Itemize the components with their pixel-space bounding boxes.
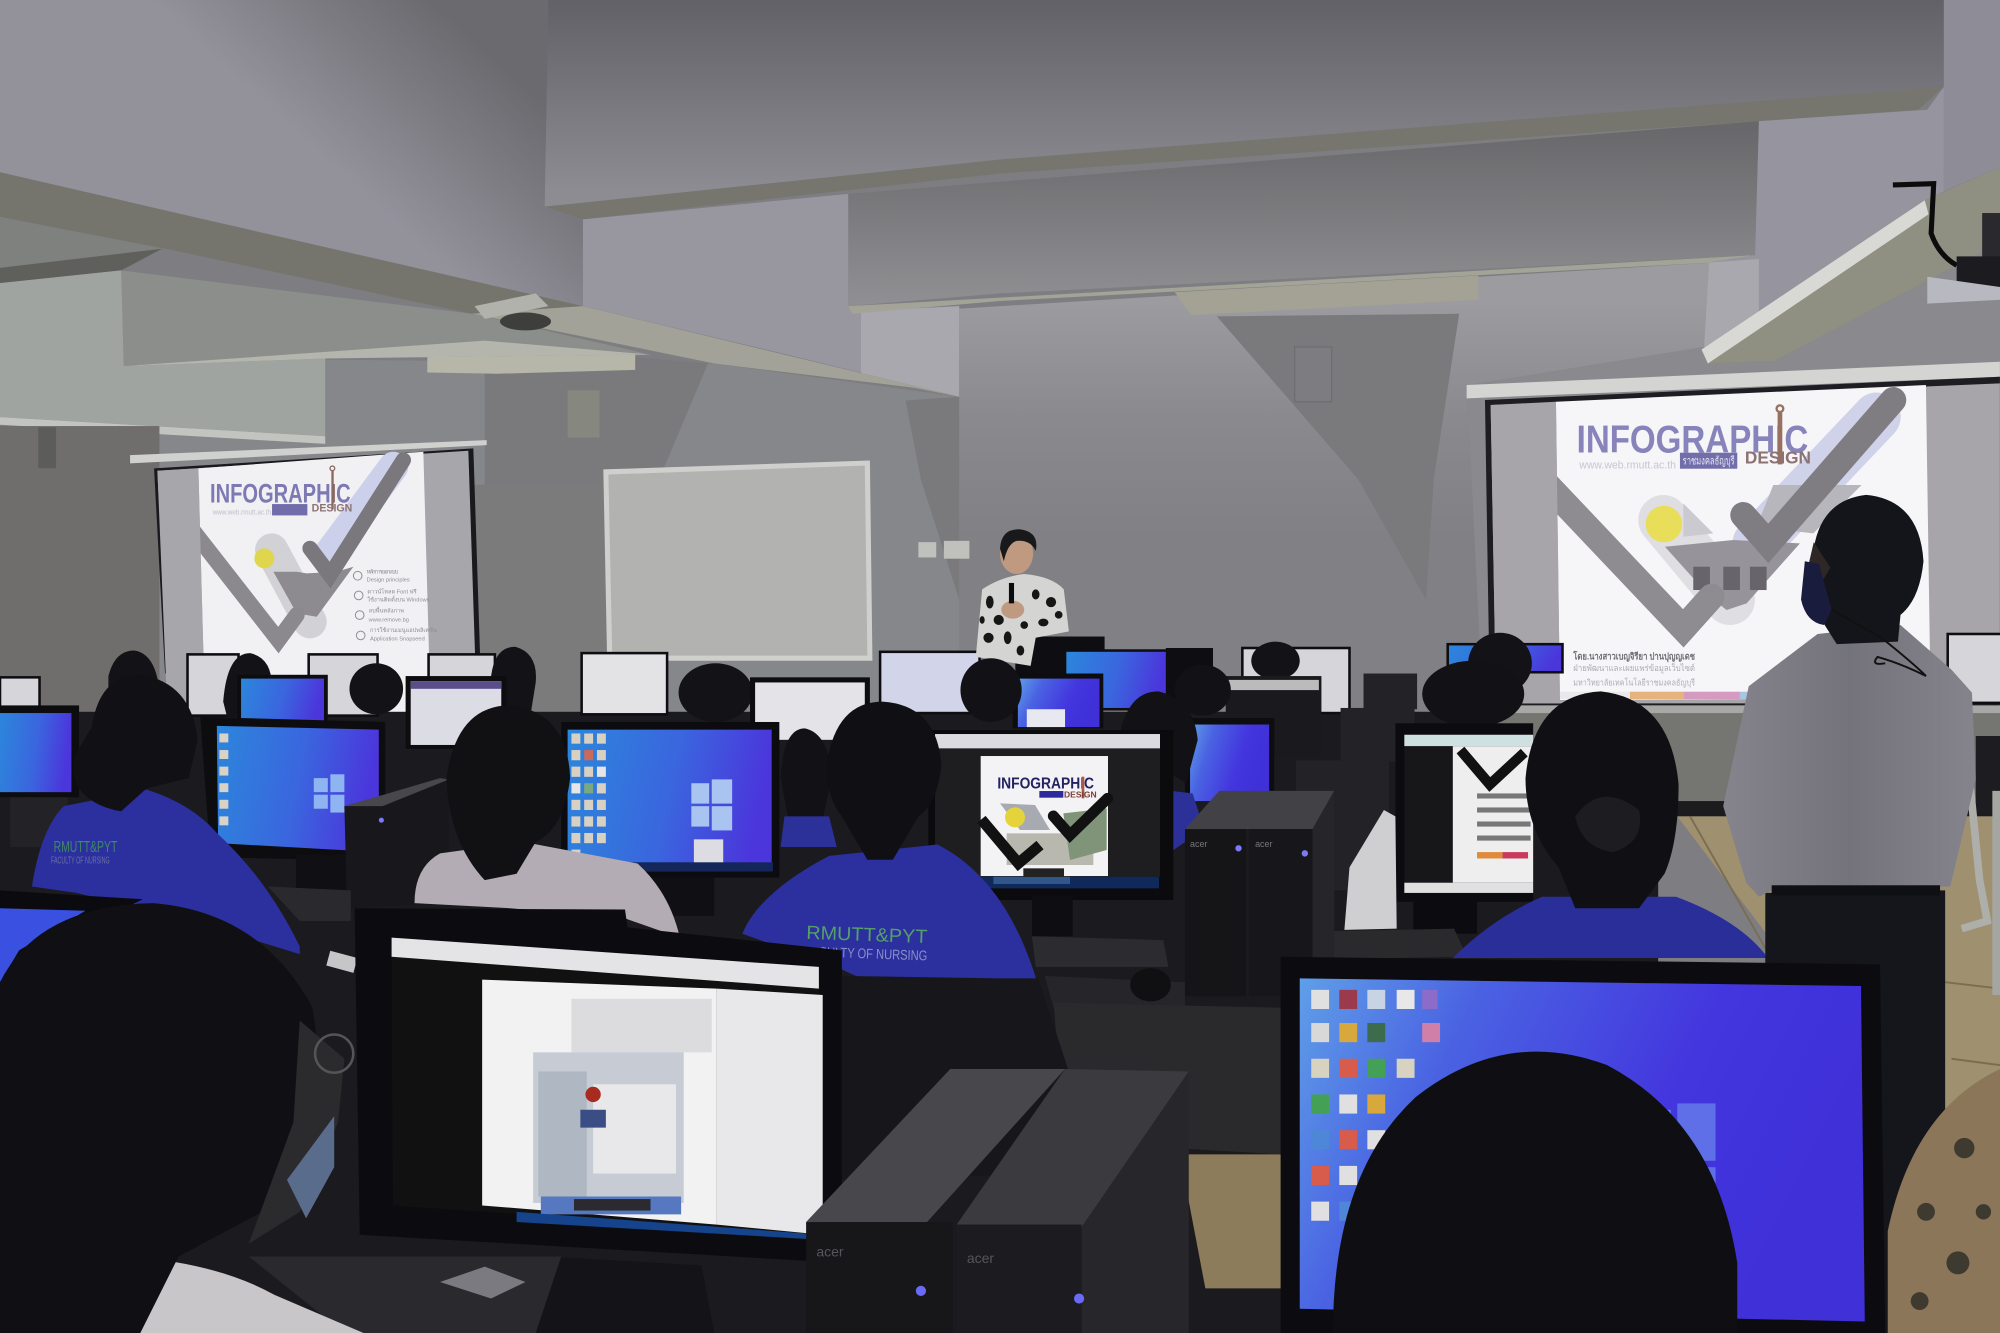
tower pair front [806, 1069, 1189, 1333]
student: front left with mask [0, 903, 364, 1333]
wall speaker panel [1295, 347, 1332, 402]
tower pair centre [1185, 791, 1334, 996]
middle students [781, 658, 1524, 819]
tower pair centre: acer [1190, 839, 1207, 849]
student: white shirt with bun hair [415, 705, 680, 938]
left screen motor vents [427, 355, 635, 374]
wall shadow triangles [485, 314, 1459, 600]
third row monitor: infographic slide: INFOGRAPHIC [997, 775, 1094, 792]
wooden floor [1180, 816, 2000, 1333]
right projection screen: DESIGN [1745, 447, 1811, 467]
right projection screen: ฝ่ายพัฒนาและเผยแพร่ข้อมูลเว็บไซต์ [1573, 662, 1695, 674]
left projection screen: ลบพื้นหลังภาพ [369, 607, 404, 615]
left projection screen: www.remove.bg [368, 618, 409, 624]
student: left blue jacket: RMUTT&PYT [54, 839, 117, 856]
desk front left [249, 1256, 561, 1333]
presenter [976, 529, 1069, 666]
phone on desk [326, 951, 357, 973]
back wall [893, 263, 1709, 765]
tower beside left monitor [344, 778, 449, 908]
left ceiling panel [0, 270, 651, 444]
tower pair centre: acer [1255, 839, 1272, 849]
right lower wall [1486, 705, 2000, 816]
left projection screen [130, 440, 487, 713]
side table and stand at right [1962, 736, 2000, 995]
front monitor: browser document [355, 908, 842, 1333]
left wall speaker [38, 427, 56, 468]
student: centre blue jacket: RMUTT&PYT [806, 923, 928, 948]
second row monitors [237, 674, 1321, 801]
student: left blue jacket [32, 675, 300, 954]
air conditioner unit [1175, 276, 1478, 315]
desk surface [1045, 976, 1282, 1154]
third row monitor: right slide [1395, 723, 1533, 934]
keyboard left [268, 887, 351, 921]
left projection screen: หลักการออกแบบ [367, 568, 399, 575]
back row students [108, 633, 1532, 722]
tower pair front: acer [967, 1250, 994, 1266]
third row monitor: left edge [0, 705, 79, 797]
student jacket background [781, 791, 1204, 853]
standing man [1723, 495, 1976, 1333]
right projection screen [1467, 362, 2000, 710]
back row screens [1, 635, 2000, 714]
front left monitor edge [0, 890, 143, 989]
right wall [1467, 242, 2000, 816]
whiteboard [603, 460, 872, 661]
left lower wall [0, 426, 159, 714]
keyboard centre [1032, 936, 1168, 967]
third row monitor: desktop wallpaper [200, 717, 385, 890]
left projection screen: ดาวน์โหลด Font ฟรี [367, 587, 417, 595]
left projection screen: INFOGRAPHIC [210, 479, 351, 509]
student: centre blue jacket: CULTY OF NURSING [819, 944, 928, 963]
small wall speaker [568, 390, 599, 438]
third row monitor: infographic slide: DESIGN [1064, 791, 1097, 800]
left projection screen: DESIGN [312, 503, 352, 515]
floral bag [1888, 1069, 2000, 1333]
student: left blue jacket: FACULTY OF NURSING [51, 856, 110, 867]
left wall [0, 360, 959, 765]
left projection screen: www.web.rmutt.ac.th [212, 508, 271, 517]
back desk right [1333, 929, 1467, 959]
ceiling and beams [0, 0, 2000, 397]
student: centre blue jacket [742, 702, 1064, 1072]
right projection screen: INFOGRAPHIC [1577, 418, 1808, 462]
left projection screen: Application Snapseed [370, 637, 425, 643]
thermostats [918, 541, 969, 559]
right projection screen: โดย.นางสาวเบญจิรียา ปานปุญญเดช [1572, 650, 1695, 662]
back row monitors [0, 633, 2000, 717]
small towers back [10, 674, 1417, 890]
projector mount [1702, 167, 2000, 364]
left projection screen: การใช้งานเมนูแอปพลิเคชัน [370, 627, 437, 634]
student: foreground head [1333, 1052, 1737, 1333]
dark desk area [0, 712, 1658, 1333]
lower left wall between screen and whiteboard [474, 485, 607, 714]
right projection screen: ราชมงคลธัญบุรี [1683, 455, 1735, 468]
third row monitor: infographic slide [928, 730, 1173, 900]
right projection screen: มหาวิทยาลัยเทคโนโลยีราชมงคลธัญบุรี [1573, 677, 1695, 688]
student white shirt right [1344, 810, 1397, 930]
paper on desk [440, 1267, 526, 1299]
right projection screen: www.web.rmutt.ac.th [1578, 459, 1676, 471]
left projection screen: ใช้งานติดตั้งบน Windows [367, 596, 430, 604]
ceiling sensor [474, 293, 551, 330]
monitor stand centre [1032, 895, 1073, 936]
front right monitor [1281, 957, 1885, 1333]
left projection screen: Design principles [367, 578, 410, 584]
tower pair front: acer [816, 1243, 844, 1259]
chair back [839, 976, 1069, 1180]
mouse [1130, 968, 1171, 1001]
student: right blue jacket [1453, 691, 1768, 958]
third row monitor: centre wallpaper with icons [561, 722, 779, 916]
